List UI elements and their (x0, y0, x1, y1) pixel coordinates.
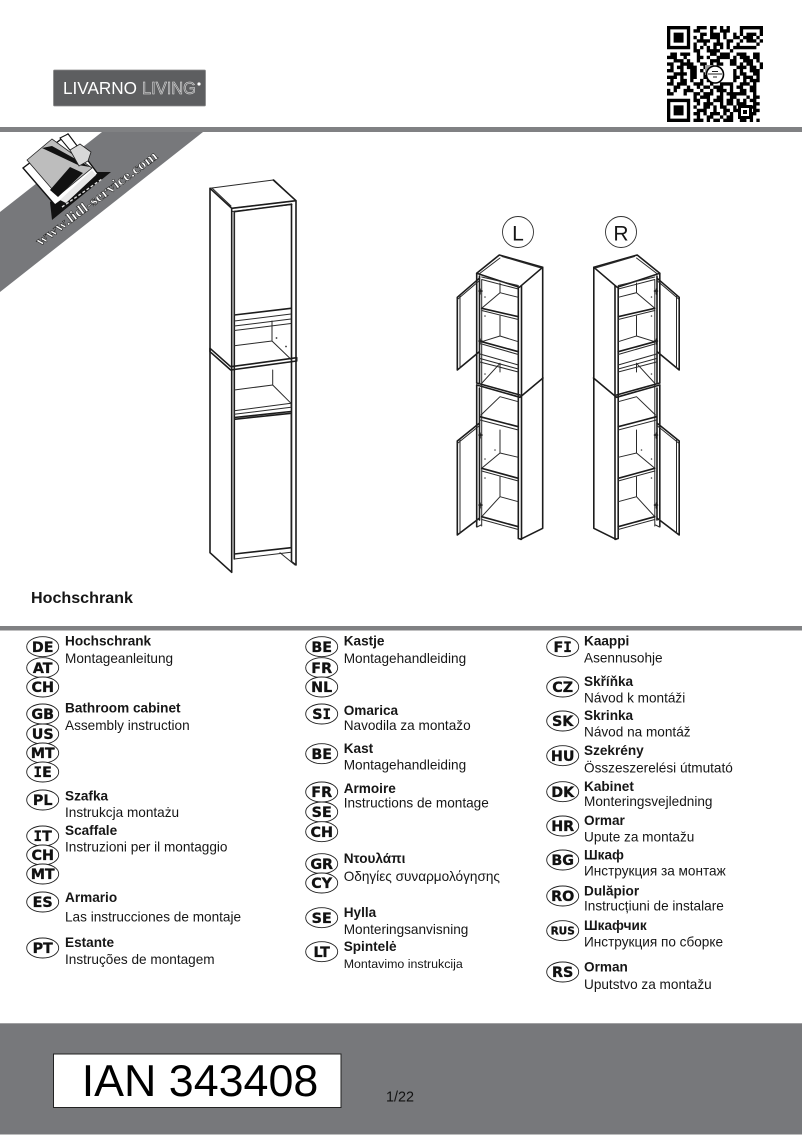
entry: BE FR NL: Montagehandleiding (344, 651, 466, 666)
entry: ES: ES (33, 895, 53, 911)
middle divider bar (0, 626, 802, 630)
language column 1 (27, 634, 241, 967)
entry: FR SE CH: Instructions de montage (344, 796, 489, 811)
entry: PT: PT (33, 941, 53, 957)
entry: LT: Montavimo instrukcija (344, 957, 463, 971)
language column 2 (306, 634, 500, 971)
entry: PT (27, 935, 215, 967)
entry: FI: Kaappi (584, 634, 629, 649)
entry: BE FR NL (306, 634, 466, 697)
entry: BE FR NL: Kastje (344, 634, 385, 649)
entry: SI (306, 703, 471, 733)
language column 3 (547, 634, 733, 992)
entry: GB US MT IE: US (32, 727, 54, 743)
entry: SK: Návod na montáž (584, 725, 691, 740)
entry: BG: Шкаф (584, 848, 624, 863)
entry: SE: Hylla (344, 905, 377, 920)
entry: GB US MT IE: MT (31, 746, 55, 762)
entry: HU: HU (551, 749, 574, 765)
circle label L: L (512, 222, 524, 246)
circle label R: R (613, 222, 629, 246)
entry: BE FR NL: FR (311, 661, 332, 677)
entry: RUS: Шкафчик (584, 918, 647, 933)
product name heading: Hochschrank (31, 589, 133, 607)
entry: GB US MT IE: GB (31, 707, 54, 723)
entry: SE: Monteringsanvisning (344, 922, 468, 937)
entry: DK: Monteringsvejledning (584, 794, 712, 809)
entry: DE AT CH: DE (32, 640, 54, 656)
entry: DE AT CH (27, 634, 173, 697)
entry: GB US MT IE: Assembly instruction (65, 718, 190, 733)
entry: ES: Armario (65, 890, 117, 905)
entry: GR CY: GR (310, 857, 333, 873)
entry: GR CY: Οδηγίες συναρμολόγησης (344, 869, 500, 884)
entry: BG: BG (551, 853, 574, 869)
entry: PL: PL (33, 793, 52, 809)
top divider bar (0, 127, 802, 132)
entry: BE FR NL: BE (311, 640, 332, 656)
entry: SE: SE (312, 911, 332, 927)
entry: LT: Spintelė (344, 939, 397, 954)
banner url: www.lidl-service.com (33, 148, 161, 250)
entry: FR SE CH: CH (310, 825, 333, 841)
entry: RO: Instrucțiuni de instalare (584, 899, 724, 914)
entry: DE AT CH: Hochschrank (65, 634, 152, 649)
entry: BE: BE (311, 747, 332, 763)
entry: IT CH MT: CH (31, 848, 54, 864)
entry: RS (547, 960, 712, 992)
diagonal service banner (0, 132, 203, 292)
entry: PT: Estante (65, 935, 115, 950)
entry: RUS: RUS (551, 926, 575, 938)
entry: HR (547, 813, 694, 845)
entry: BG (547, 848, 727, 879)
entry: FI: FI (554, 640, 572, 656)
illustration: closed tall cabinet (210, 180, 297, 572)
entry: DK (547, 779, 712, 809)
entry: IT CH MT: Scaffale (65, 823, 118, 838)
entry: PL: Szafka (65, 789, 109, 804)
entry: GB US MT IE: IE (34, 765, 52, 781)
entry: SE (306, 905, 468, 937)
entry: DE AT CH: AT (33, 661, 53, 677)
entry: FI: Asennusohje (584, 651, 663, 666)
entry: RS: Uputstvo za montažu (584, 977, 712, 992)
entry: GR CY: CY (311, 876, 333, 892)
entry: ES (27, 890, 241, 925)
logo: Livarno Living: LIVARNO (63, 78, 137, 98)
entry: RUS: Инструкция по сборке (584, 935, 723, 950)
entry: RO: RO (551, 889, 574, 905)
illustration: right-hinged cabinet with open doors (594, 255, 679, 539)
entry: DE AT CH: CH (31, 680, 54, 696)
illustration: left-hinged cabinet with open doors (457, 255, 543, 539)
entry: CZ (547, 674, 685, 706)
entry: SK: Skrinka (584, 708, 634, 723)
page number: 1/22 (386, 1090, 414, 1106)
entry: HR: HR (551, 819, 574, 835)
entry: CZ: Návod k montáži (584, 691, 685, 706)
entry: HU: Szekrény (584, 743, 644, 758)
entry: IT CH MT: MT (31, 867, 55, 883)
entry: HU (547, 743, 733, 776)
entry: PL: Instrukcja montażu (65, 805, 179, 820)
icon: manual book with hand (23, 134, 111, 220)
entry: DK: Kabinet (584, 779, 634, 794)
QR code (667, 28, 763, 120)
entry: SI: Omarica (344, 703, 399, 718)
circle label L (502, 216, 534, 248)
entry: SI: SI (312, 707, 331, 723)
logo: Livarno Living: LIVING (142, 78, 196, 98)
entry: BG: Инструкция за монтаж (584, 864, 727, 879)
entry: HR: Ormar (584, 813, 626, 828)
entry: RS: RS (552, 965, 573, 981)
IAN number box: IAN 343408 (82, 1056, 318, 1106)
entry: BE FR NL: NL (311, 680, 332, 696)
circle label R (606, 216, 636, 248)
entry: IT CH MT: Instruzioni per il montaggio (65, 840, 227, 855)
entry: RO (547, 884, 724, 914)
entry: SK (547, 708, 691, 740)
entry: CZ: CZ (552, 680, 573, 696)
entry: HU: Összeszerelési útmutató (584, 761, 733, 776)
entry: FR SE CH: SE (312, 805, 332, 821)
entry: BE: Montagehandleiding (344, 758, 466, 773)
entry: FR SE CH: FR (311, 785, 332, 801)
entry: FI (547, 634, 663, 666)
entry: GR CY (306, 851, 500, 893)
entry: RO: Dulăpior (584, 884, 640, 899)
entry: GR CY: Ντουλάπι (344, 851, 406, 866)
entry: CZ: Skříňka (584, 674, 634, 689)
entry: DK: DK (551, 785, 575, 801)
entry: BE (306, 741, 466, 773)
logo: Livarno Living (54, 70, 206, 106)
entry: RS: Orman (584, 960, 628, 975)
entry: SK: SK (552, 714, 574, 730)
entry: LT: LT (313, 945, 330, 961)
entry: GB US MT IE: Bathroom cabinet (65, 701, 181, 716)
footer band (0, 1023, 802, 1134)
entry: HR: Upute za montažu (584, 830, 694, 845)
entry: FR SE CH (306, 781, 489, 842)
entry: BE: Kast (344, 741, 374, 756)
entry: DE AT CH: Montageanleitung (65, 651, 173, 666)
entry: SI: Navodila za montažo (344, 718, 471, 733)
entry: FR SE CH: Armoire (344, 781, 396, 796)
entry: GB US MT IE (27, 701, 190, 782)
entry: ES: Las instrucciones de montaje (65, 910, 241, 925)
entry: PT: Instruções de montagem (65, 952, 215, 967)
entry: PL (27, 789, 179, 820)
entry: IT CH MT (27, 823, 227, 884)
entry: LT (306, 939, 463, 971)
entry: RUS (547, 918, 723, 950)
entry: IT CH MT: IT (34, 829, 52, 845)
